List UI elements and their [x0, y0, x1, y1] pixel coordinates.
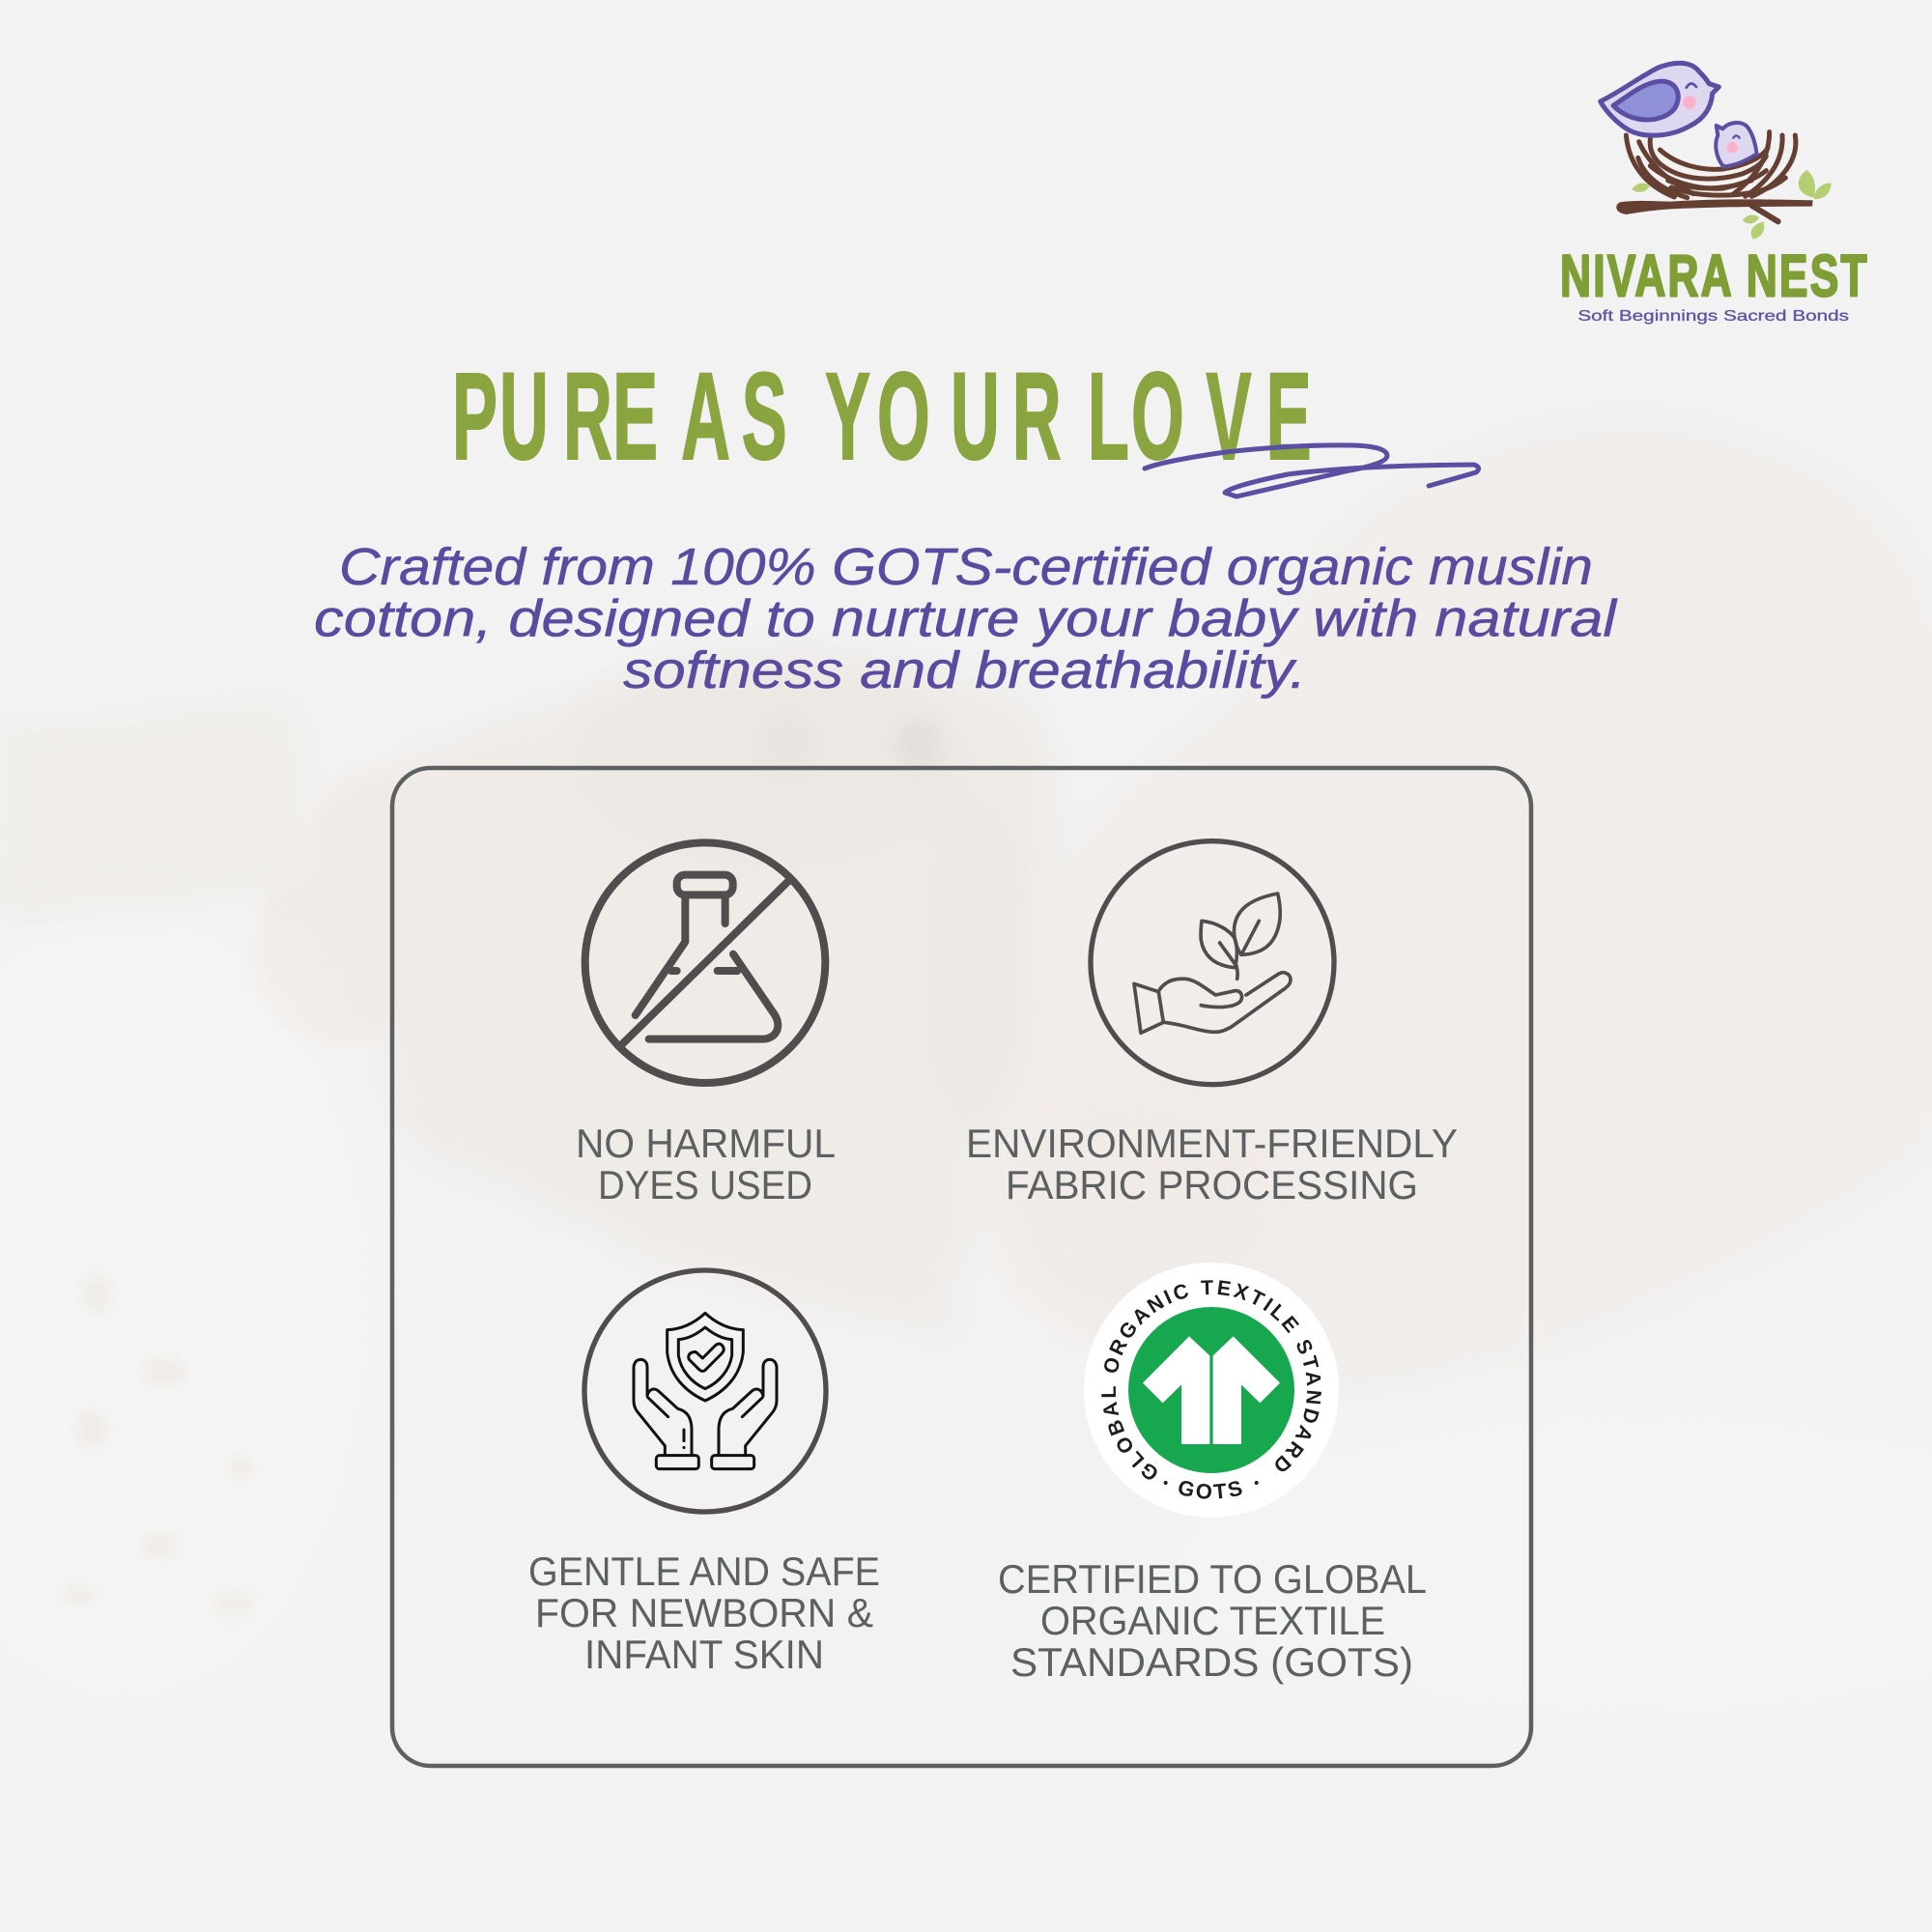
icon: GOTS badge: GLOBAL ORGANIC TEXTILE STANDARD: [1101, 1280, 1321, 1480]
label: environment-friendly: FABRIC PROCESSING: [1006, 1162, 1418, 1208]
subtitle text: [314, 538, 1618, 699]
label: environment-friendly: [966, 1121, 1458, 1208]
icon: hands with shield: [584, 1270, 826, 1512]
label: certified GOTS: ORGANIC TEXTILE: [1040, 1598, 1385, 1643]
icon: mother bird: [1601, 63, 1719, 135]
label: gentle and safe: GENTLE AND SAFE: [528, 1548, 880, 1594]
subtitle text: softness and breathability.: [623, 641, 1306, 699]
label: gentle and safe: [528, 1548, 880, 1677]
label: no harmful dyes: NO HARMFUL: [576, 1121, 836, 1166]
logo tagline: Soft Beginnings Sacred Bonds: [1577, 308, 1849, 325]
logo: Nivara Nest: [1560, 63, 1869, 325]
label: certified GOTS: CERTIFIED TO GLOBAL: [998, 1556, 1427, 1602]
panel: features: [390, 765, 1534, 1768]
label: environment-friendly: ENVIRONMENT-FRIENDLY: [966, 1121, 1458, 1166]
icon: hand with plant: [1091, 841, 1334, 1085]
icon: baby bird: [1716, 123, 1757, 166]
subtitle text: Crafted from 100% GOTS-certified organic muslin: [339, 538, 1593, 596]
icon: GOTS badge: GOTS: [1179, 1481, 1242, 1499]
label: gentle and safe: INFANT SKIN: [584, 1632, 824, 1677]
icon: leaves: [1632, 170, 1832, 240]
logo wordmark: NIVARA NEST: [1560, 243, 1869, 309]
icon: no harmful dyes flask: [585, 842, 825, 1083]
title: PURE AS YOUR LOVE: [452, 347, 1312, 485]
subtitle text: cotton, designed to nurture your baby with natural: [314, 589, 1618, 647]
scribble underline: [1145, 445, 1479, 497]
label: no harmful dyes: DYES USED: [598, 1162, 812, 1208]
label: gentle and safe: FOR NEWBORN &: [535, 1590, 873, 1635]
label: certified GOTS: STANDARDS (GOTS): [1010, 1639, 1413, 1685]
label: certified GOTS: [998, 1556, 1427, 1685]
icon: nest and branch: [1616, 132, 1813, 221]
label: no harmful dyes: [576, 1121, 836, 1208]
